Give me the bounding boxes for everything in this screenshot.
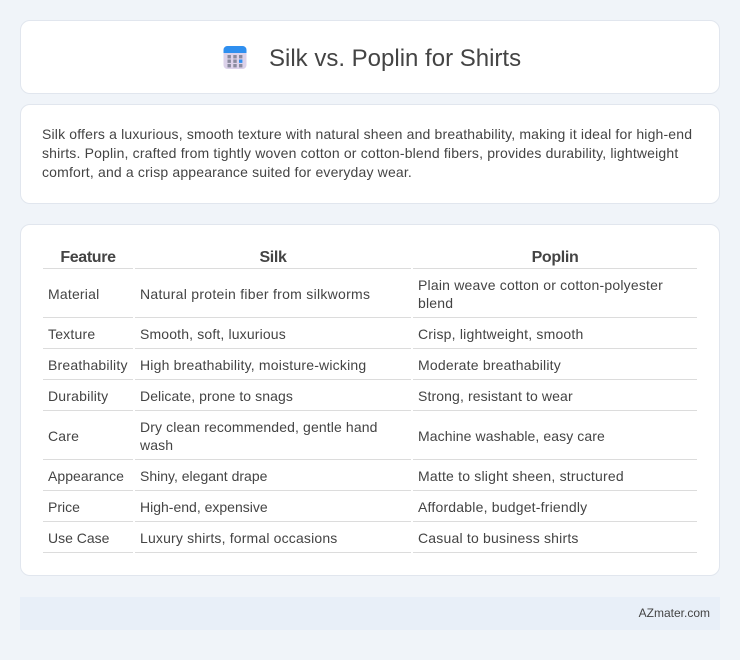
footer credit: AZmater.com [639,606,710,620]
row: Material: blend [418,295,453,311]
row: Care [48,419,605,453]
title card [20,20,720,94]
row: Durability: Strong, resistant to wear [418,388,573,404]
table header: Poplin [532,249,578,266]
table header: Silk [259,249,287,266]
row: Texture: Texture [48,326,95,342]
row: Texture: Crisp, lightweight, smooth [418,326,584,342]
intro text panel: shirts. Poplin, crafted from tightly woven cotton or cotton-blend fibers, provides durability, lightweight [42,145,678,161]
row: Use Case: Use Case [48,530,109,546]
row: Price: High-end, expensive [140,499,268,515]
row: Care: Machine washable, easy care [418,428,605,444]
row: Care: Dry clean recommended, gentle hand [140,419,378,435]
icon: calendar [224,46,246,69]
row: Texture: Smooth, soft, luxurious [140,326,286,342]
intro text panel [20,104,720,204]
row: Use Case [48,530,579,546]
row: Care: wash [140,437,173,453]
row: Use Case: Luxury shirts, formal occasions [140,530,337,546]
row: Durability [48,388,573,404]
intro text panel: comfort, and a crisp appearance suited for everyday wear. [42,164,412,180]
row: Appearance [48,468,624,484]
row: Use Case: Casual to business shirts [418,530,579,546]
row: Price: Affordable, budget-friendly [418,499,587,515]
row: Material [48,277,663,311]
row: Breathability: Breathability [48,357,128,373]
row: Appearance: Shiny, elegant drape [140,468,267,484]
row: Material: Natural protein fiber from silkworms [140,286,370,302]
row: Durability: Delicate, prone to snags [140,388,293,404]
comparison table panel [20,224,720,576]
row: Breathability: High breathability, moisture-wicking [140,357,366,373]
row: Price [48,499,588,515]
row: Material: Plain weave cotton or cotton-polyester [418,277,663,293]
footer bar [20,597,720,630]
row: Appearance: Appearance [48,468,124,484]
intro text panel: Silk offers a luxurious, smooth texture with natural sheen and breathability, making it ideal for high-end [42,126,692,142]
row: Care: Care [48,428,79,444]
row: Material: Material [48,286,99,302]
row: Texture [48,326,584,342]
row: Breathability [48,357,561,373]
row: Price: Price [48,499,80,515]
row: Appearance: Matte to slight sheen, structured [418,468,624,484]
row: Durability: Durability [48,388,108,404]
row: Breathability: Moderate breathability [418,357,561,373]
table header [60,249,578,266]
heading: Silk vs. Poplin for Shirts [269,45,521,72]
table header: Feature [60,249,116,266]
